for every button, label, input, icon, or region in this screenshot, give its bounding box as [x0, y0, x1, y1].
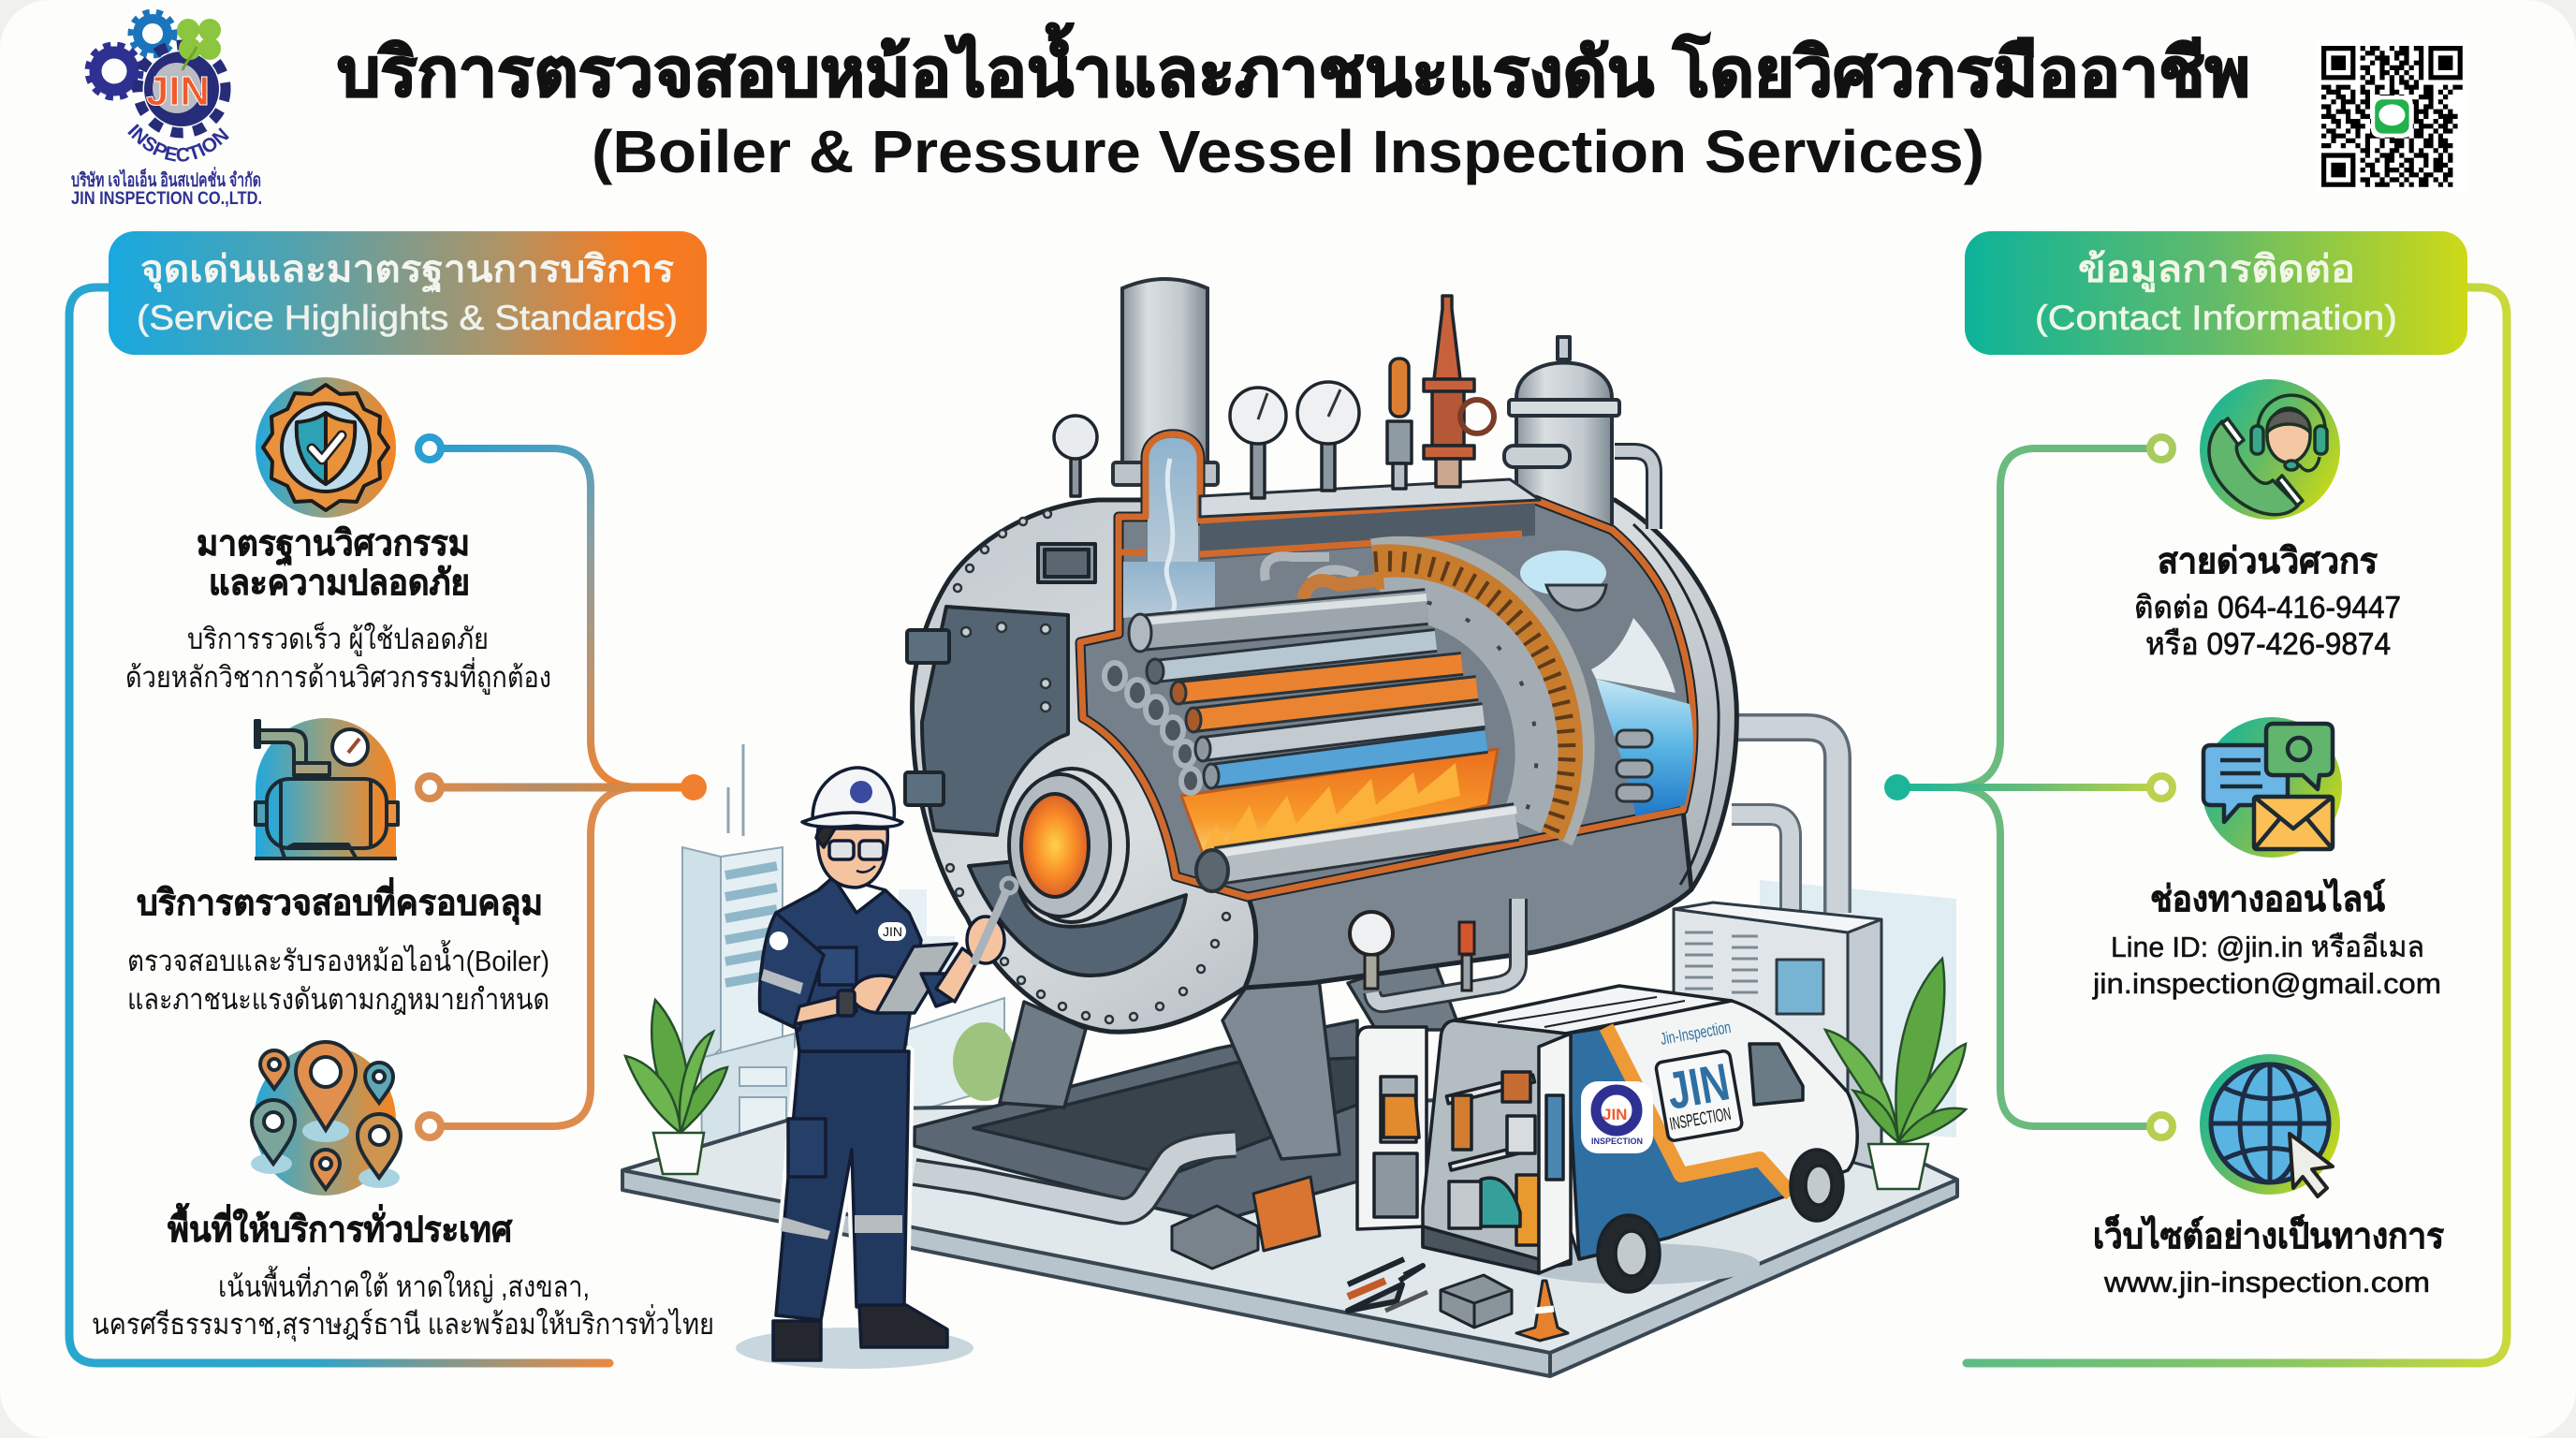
illustration: cutaway interior: [1080, 434, 1693, 897]
main title: บริการตรวจสอบหม้อไอน้ำและภาชนะแรงดัน โดยวิศวกรมืออาชีพ: [337, 22, 2250, 110]
text: inspection coverage: [127, 877, 549, 1016]
illustration: front door and port: [905, 544, 1186, 976]
illustration: background buildings: [682, 744, 1956, 1168]
text: online channels: ช่องทางออนไลน์: [2150, 878, 2385, 919]
text: official website: เว็บไซต์อย่างเป็นทางการ: [2093, 1214, 2445, 1256]
company logo: INSPECTION: [127, 124, 229, 162]
text: engineering standards: [125, 524, 551, 695]
illustration: flames: [1181, 749, 1498, 866]
company logo: JIN: [146, 68, 210, 114]
text: inspection coverage: ตรวจสอบและรับรองหม้อไอน้ำ(Boiler): [127, 940, 549, 977]
company logo: บริษัท เจไอเอ็น อินสเปคชั่น จำกัด: [71, 166, 261, 191]
illustration: control cabinet: [1674, 902, 1881, 1170]
text: inspection coverage: บริการตรวจสอบที่ครอบคลุม: [137, 877, 543, 925]
illustration: service van: JIN: [1662, 1051, 1734, 1121]
text: service area: พื้นที่ให้บริการทั่วประเทศ: [168, 1203, 513, 1250]
text: service area: นครศรีธรรมราช,สุราษฎร์ธานี และพร้อมให้บริการทั่วไทย: [92, 1304, 714, 1343]
heading: contact information: (Contact Information): [2035, 299, 2397, 337]
illustration: service van: JIN: [1603, 1106, 1627, 1123]
icon: online channels: [2202, 717, 2342, 858]
icon: pressure vessel: [255, 718, 398, 858]
text: online channels: jin.inspection@gmail.com: [2092, 967, 2441, 1000]
illustration: boiler base and legs: [915, 946, 1460, 1222]
panel: service highlights frame: [69, 287, 609, 1363]
illustration: back pipes: [1732, 727, 1837, 974]
text: engineering standards: ด้วยหลักวิชาการด้านวิศวกรรมที่ถูกต้อง: [125, 657, 551, 695]
illustration: shell bolts: [946, 510, 1230, 1023]
text: engineering standards: และความปลอดภัย: [209, 564, 470, 603]
text: online channels: [2092, 878, 2441, 1000]
text: engineering standards: มาตรฐานวิศวกรรม: [197, 524, 470, 566]
illustration: gear ring: [1374, 561, 1565, 831]
panel: contact information frame: [1967, 287, 2507, 1363]
illustration: service van: INSPECTION: [1591, 1137, 1643, 1146]
heading: service highlights: (Service Highlights & Standards): [137, 299, 678, 337]
heading: contact information: ข้อมูลการติดต่อ: [2078, 249, 2355, 292]
illustration: chimney: [1113, 279, 1218, 485]
QR code: [2317, 41, 2467, 192]
illustration: service van: Jin-Inspection: [1659, 1018, 1733, 1049]
illustration: right plant: [1825, 959, 1966, 1189]
heading: service highlights: จุดเด่นและมาตรฐานการบริการ: [140, 249, 675, 294]
connector: left branches: [418, 437, 707, 1137]
text: engineer hotline: สายด่วนวิศวกร: [2158, 542, 2378, 581]
company logo: [71, 9, 262, 209]
illustration: boiler tubes: [1105, 597, 1516, 891]
text: engineer hotline: หรือ 097-426-9874: [2145, 626, 2391, 661]
text: official website: [2093, 1214, 2445, 1299]
illustration: gauges and valves: [1054, 296, 1494, 498]
illustration: steam drum and side pipe: [1504, 337, 1654, 538]
illustration: left plant: [625, 1000, 727, 1174]
text: engineering standards: บริการรวดเร็ว ผู้ใช้ปลอดภัย: [187, 622, 489, 656]
icon: telephone hotline: [2200, 379, 2340, 520]
text: engineer hotline: ติดต่อ 064-416-9447: [2134, 590, 2401, 624]
illustration: service van: [1357, 986, 1857, 1292]
heading: contact information: [1965, 231, 2467, 355]
icon: location pins: [251, 1042, 401, 1196]
illustration: engineer worker: [736, 768, 1017, 1369]
text: engineer hotline: [2134, 542, 2401, 661]
illustration: service van: INSPECTION: [1668, 1105, 1733, 1135]
main title: (Boiler & Pressure Vessel Inspection Services): [592, 118, 1984, 185]
illustration: platform: [622, 1095, 1957, 1376]
text: inspection coverage: และภาชนะแรงดันตามกฎหมายกำหนด: [127, 983, 549, 1016]
text: service area: [92, 1203, 714, 1343]
connector: right branches: [1884, 437, 2173, 1137]
illustration: engineer worker: JIN: [883, 924, 902, 939]
illustration: boiler shell: [913, 500, 1736, 1032]
illustration: tools and cone: [1172, 1177, 1568, 1341]
text: official website: www.jin-inspection.com: [2103, 1266, 2430, 1299]
text: online channels: Line ID: @jin.in หรืออีเมล: [2111, 931, 2424, 963]
icon: safety badge: [256, 377, 396, 518]
company logo: JIN INSPECTION CO.,LTD.: [71, 189, 262, 209]
icon: website globe: [2200, 1054, 2340, 1196]
illustration: lower gauge and pipework: [1350, 899, 1518, 1004]
illustration: water tank: [1520, 550, 1693, 816]
heading: service highlights: [109, 231, 707, 355]
text: service area: เน้นพื้นที่ภาคใต้ หาดใหญ่ ,สงขลา,: [218, 1266, 590, 1303]
main title: [337, 22, 2250, 185]
